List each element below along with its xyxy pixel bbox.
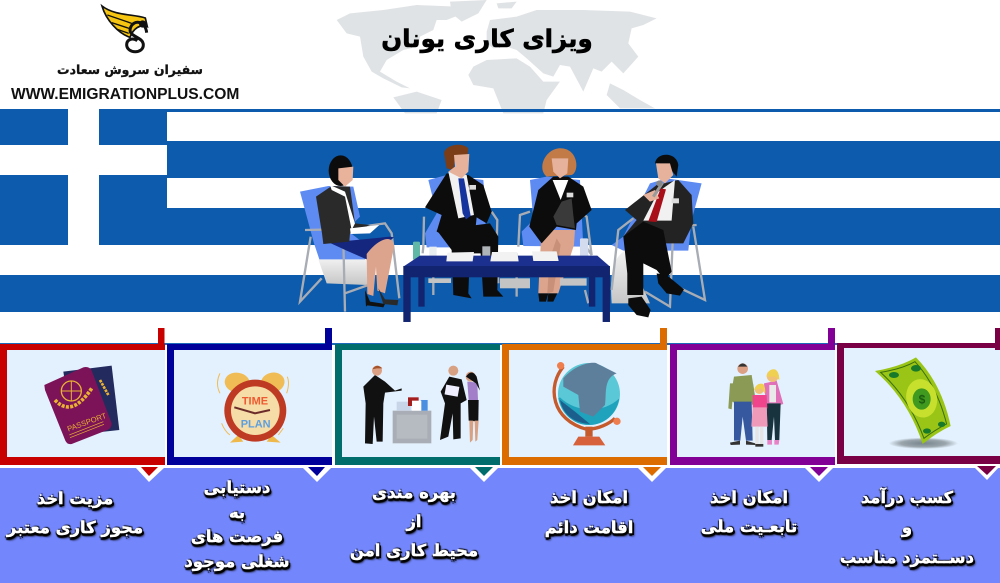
card 4 frame: globe (502, 328, 667, 465)
icon: office coworkers (363, 366, 480, 444)
label: permanent residence: امکان اخذ (550, 488, 628, 507)
table (403, 251, 610, 322)
chair and panelist: woman with red hair (517, 148, 592, 303)
icon: passports: PASSPORT (66, 411, 108, 434)
label: job opportunities (184, 478, 292, 576)
icon: dollar bill: $ (919, 392, 926, 406)
card 5 frame: family (670, 328, 835, 465)
label: safe workplace: بهره مندی (372, 483, 456, 502)
pointer triangles (135, 466, 1000, 482)
icon: alarm clock: PLAN (241, 419, 271, 431)
label: job opportunities: دستیابی (204, 478, 270, 497)
label: citizenship: امکان اخذ (710, 488, 788, 507)
card 1 frame: passport (0, 328, 165, 465)
bottom label band (0, 468, 1000, 583)
label: job opportunities: شغلی موجود (184, 552, 290, 571)
label: permanent residence: اقامت دائم (545, 518, 633, 537)
card 3 frame: office (335, 344, 500, 465)
bottles and glasses (413, 238, 588, 260)
label: job opportunities: فرصت های (191, 527, 283, 546)
meeting illustration (300, 145, 705, 322)
label: income: و (902, 518, 912, 537)
label: permanent residence (544, 488, 636, 542)
label: work permit: مزیت اخذ (37, 489, 113, 508)
icon: family (728, 363, 783, 447)
logo wordmark: سفیران سروش سعادت (57, 62, 203, 77)
label: safe workplace: از (406, 512, 422, 531)
logo: winged bird (102, 6, 147, 52)
icon: alarm clock (217, 370, 288, 443)
label: income (839, 486, 977, 572)
label: citizenship (700, 488, 800, 540)
label: safe workplace (349, 483, 480, 565)
label: work permit: مجوز کاری معتبر (7, 518, 143, 537)
chair shadows under table (428, 278, 587, 288)
title: ویزای کاری یونان (381, 24, 593, 53)
chair and panelist: man with blue tie (423, 145, 503, 298)
Greek flag background (0, 109, 1000, 345)
label: safe workplace: محیط کاری امن (350, 541, 478, 560)
card 6 frame: money (837, 328, 1000, 464)
chair and panelist: man with microphone (611, 155, 705, 317)
icon: globe (554, 362, 621, 445)
label: job opportunities: به (229, 503, 245, 522)
icon: passports (44, 366, 119, 444)
label: income: کسب درآمد (861, 488, 953, 507)
label: income: دســتمزد مناسب (840, 548, 974, 567)
world map background (337, 0, 657, 113)
label: citizenship: تابعـیت ملی (701, 517, 797, 536)
website url: WWW.EMIGRATIONPLUS.COM (11, 86, 239, 103)
card 2 frame: clock (167, 328, 332, 465)
icon: alarm clock: TIME (242, 396, 268, 408)
label: work permit (4, 489, 146, 542)
chair and panelist: woman with notebook (300, 155, 399, 312)
icon: dollar bill (875, 357, 958, 449)
